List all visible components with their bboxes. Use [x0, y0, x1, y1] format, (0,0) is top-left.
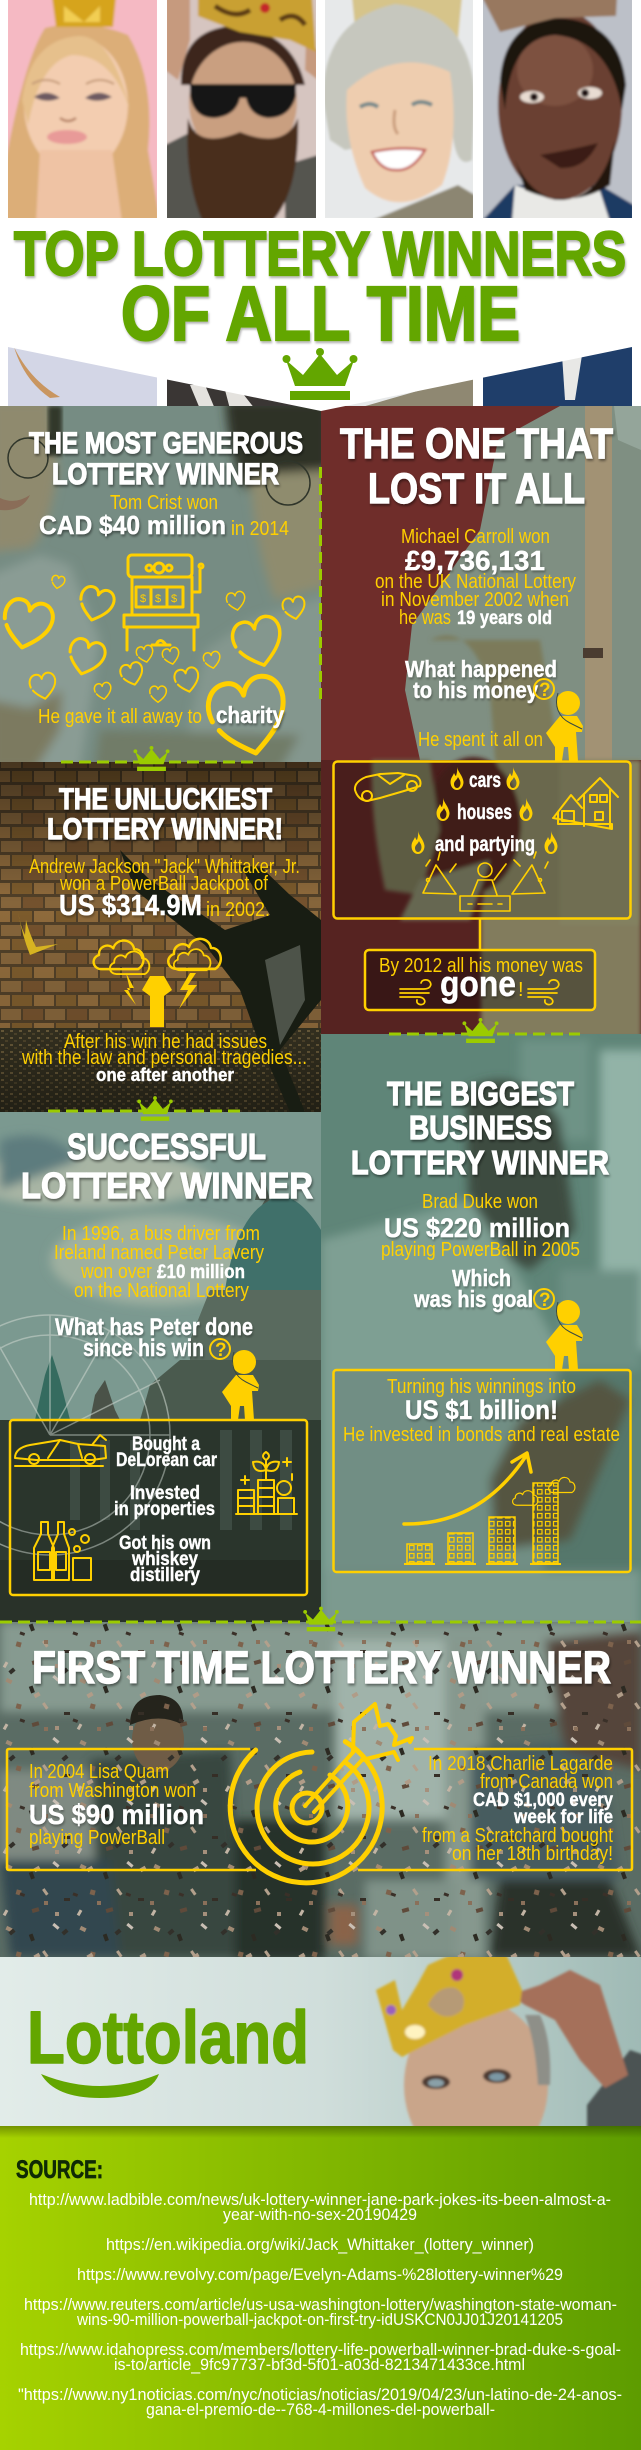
icon: target and arrow: [224, 1704, 412, 1890]
prize text: Tom Crist won: [110, 492, 218, 514]
box: money gone: [365, 950, 595, 1010]
prize text: CAD $40 million: [39, 510, 226, 540]
panel: successful winner: [0, 1112, 321, 1622]
question: [55, 1314, 253, 1362]
text: Lisa Quam: playing PowerBall: [29, 1827, 165, 1849]
question: was his goal: [413, 1286, 533, 1312]
background photo: businessman: [321, 1034, 641, 1630]
background photo: confetti party: [0, 1622, 641, 1960]
prize text: US $314.9M: [59, 890, 202, 922]
question: What happened: [405, 656, 557, 682]
heading: LOTTERY WINNER!: [47, 813, 283, 846]
icon: person with question magnifier: [534, 1289, 583, 1370]
photo: older woman smiling: [323, 0, 475, 222]
source links: https://www.reuters.com/article/us-usa-washington-lottery/washington-state-woman-: [24, 2295, 617, 2314]
text: Charlie Lagarde: In 2018 Charlie Lagarde: [428, 1753, 613, 1775]
text: Charlie Lagarde: CAD $1,000 every: [473, 1790, 613, 1811]
logo: Lottoland: [27, 1996, 309, 2079]
panel: the one that lost it all: [321, 406, 641, 1038]
heading: LOTTERY WINNER: [21, 1165, 313, 1206]
icon: title crown: [282, 348, 358, 400]
list of achievements: [114, 1434, 217, 1586]
question: [405, 656, 557, 703]
icon: delorean: [15, 1435, 106, 1466]
story text: won over: [80, 1261, 152, 1283]
question: Which: [452, 1265, 511, 1291]
connector: [479, 918, 481, 950]
list of achievements: distillery: [130, 1565, 200, 1586]
list of achievements: Bought a: [132, 1434, 200, 1455]
text: Charlie Lagarde: [422, 1753, 613, 1865]
question: to his money: [413, 677, 538, 703]
icon: banana peel: [18, 912, 58, 955]
prize text: [29, 856, 300, 922]
story text: In 1996, a bus driver from: [62, 1223, 260, 1245]
icon: sports car: [355, 773, 420, 801]
source links: is-to/article_9fc97737-bf3d-5f01-a03d-8213471433ce.html: [114, 2355, 525, 2374]
text: Lisa Quam: US $90 million: [29, 1799, 204, 1830]
source links: year-with-no-sex-20190429: [223, 2205, 417, 2224]
prize text: in November 2002 when: [381, 589, 569, 611]
prize text: Andrew Jackson "Jack" Whittaker, Jr.: [29, 856, 300, 878]
icon: hearts: [0, 575, 307, 761]
box: one billion goal: US $1 billion!: [405, 1395, 558, 1425]
panel: sources: [0, 2126, 641, 2450]
text: Lisa Quam: [29, 1761, 204, 1849]
closing text: [38, 702, 284, 728]
story text: Ireland named Peter Lavery: [54, 1242, 264, 1264]
prize text: playing PowerBall in 2005: [381, 1239, 580, 1261]
panel: unluckiest winner: [0, 762, 321, 1112]
text: Charlie Lagarde: week for life: [513, 1807, 613, 1828]
photo: man with crown: [374, 1957, 641, 2126]
prize text: 19 years old: [457, 608, 552, 629]
icon: person with question magnifier: [534, 679, 583, 761]
box: spending list: houses: [457, 801, 512, 824]
question: since his win: [83, 1335, 204, 1362]
panel: first time winner: [0, 1622, 641, 1960]
text: Charlie Lagarde: from Canada won: [480, 1771, 613, 1793]
prize text: won a PowerBall Jackpot of: [59, 873, 268, 895]
background photo: brick wall and falling man: [0, 762, 321, 1112]
prize text: US $220 million: [384, 1213, 570, 1243]
title: [14, 220, 626, 357]
prize text: [39, 492, 289, 540]
panel: Lottoland banner: [0, 1957, 641, 2126]
icon: growing buildings: [404, 1477, 575, 1564]
source links: http://www.ladbible.com/news/uk-lottery-winner-jane-park-jokes-its-been-almost-a-: [29, 2190, 611, 2209]
box: spending list: and partying: [435, 833, 535, 856]
icon: slot machine: $: [140, 593, 146, 605]
heading: [351, 1075, 609, 1181]
source links: gana-el-premio-de--768-4-millones-del-powerball-: [146, 2400, 495, 2419]
heading: LOST IT ALL: [368, 465, 585, 513]
prize text: Brad Duke won: [422, 1191, 538, 1213]
source links: https://www.idahopress.com/members/lottery-life-powerball-winner-brad-duke-s-goal-: [20, 2340, 621, 2359]
prize text: he was: [399, 607, 451, 629]
icon: person with question magnifier: [210, 1339, 259, 1420]
prize text: [375, 526, 576, 629]
source links: https://www.revolvy.com/page/Evelyn-Adams-%28lottery-winner%29: [77, 2265, 563, 2284]
heading: THE BIGGEST: [387, 1075, 574, 1112]
heading: LOTTERY WINNER: [52, 458, 279, 491]
photo: blonde woman: [4, 0, 160, 222]
prize text: in 2002.: [206, 899, 270, 921]
panel: most generous winner: [0, 400, 330, 770]
icon: slot machine: $: [155, 593, 161, 605]
source links: https://en.wikipedia.org/wiki/Jack_Whittaker_(lottery_winner): [106, 2235, 534, 2254]
box: what Peter did: [10, 1420, 307, 1595]
heading: LOTTERY WINNER: [351, 1144, 609, 1181]
box: spending list: [334, 762, 630, 918]
photo strip below title: [8, 347, 632, 409]
icon: dj and party poppers: [423, 852, 548, 911]
heading: [47, 783, 283, 846]
text: Lisa Quam: from Washington won: [29, 1780, 196, 1802]
text: he spent it all on: He spent it all on: [418, 729, 543, 751]
box: money gone: gone: [440, 963, 516, 1004]
list of achievements: DeLorean car: [116, 1450, 217, 1471]
closing text: one after another: [96, 1065, 234, 1085]
icon: houses: [553, 778, 618, 829]
text: Lisa Quam: In 2004 Lisa Quam: [29, 1761, 169, 1783]
list of achievements: whiskey: [131, 1549, 198, 1570]
prize text: on the UK National Lottery: [375, 571, 576, 593]
white chevron behind title: [0, 218, 641, 411]
box: one billion goal: Turning his winnings into: [387, 1376, 576, 1398]
icon: slot machine: [124, 555, 203, 650]
box: one billion goal: [334, 1370, 630, 1572]
panel: header photos: [4, 0, 634, 409]
prize text: in 2014: [231, 518, 289, 540]
dividers: crowns and dashed lines: [0, 467, 641, 1631]
heading: SUCCESSFUL: [67, 1126, 266, 1167]
title: OF ALL TIME: [121, 271, 520, 357]
photo: bearded man with crown: [165, 0, 318, 222]
heading: [21, 1126, 313, 1206]
prize text: [381, 1191, 580, 1261]
prize text: £9,736,131: [405, 545, 545, 576]
story text: on the National Lottery: [74, 1280, 249, 1302]
list of achievements: Got his own: [119, 1533, 211, 1554]
background photo: Belfast city hall: [0, 1112, 321, 1622]
closing text: with the law and personal tragedies...: [21, 1047, 307, 1069]
closing text: After his win he had issues: [64, 1031, 267, 1053]
icon: storm clouds over person: [94, 939, 221, 1027]
list of achievements: in properties: [114, 1499, 215, 1520]
heading: THE UNLUCKIEST: [59, 783, 272, 816]
box: money gone: !: [518, 979, 524, 1001]
box: spending list: cars: [469, 769, 501, 792]
source links: [18, 2190, 622, 2419]
background photo: two men: [0, 400, 330, 770]
icon: plant on coins: [236, 1452, 297, 1514]
source links: wins-90-million-powerball-jackpot-on-first-try-idUSKCN0JJ01J20141205: [76, 2310, 563, 2329]
text: Charlie Lagarde: on her 18th birthday!: [452, 1843, 613, 1865]
story text: £10 million: [157, 1262, 245, 1283]
heading: THE MOST GENEROUS: [29, 427, 303, 460]
icon: flames: [412, 767, 558, 854]
icon: person with question magnifier: ?: [215, 1340, 227, 1361]
heading: [29, 427, 303, 491]
question: What has Peter done: [55, 1314, 253, 1341]
background photo: man with empty pockets: [321, 406, 641, 1038]
icon: slot machine: $: [171, 593, 177, 605]
closing text: charity: [216, 702, 284, 728]
closing text: [21, 1031, 307, 1085]
arrow: growth: [404, 1453, 531, 1524]
panel: biggest business winner: [321, 1034, 641, 1630]
story text: [54, 1223, 264, 1302]
photo: man in navy suit: [481, 0, 634, 222]
source links: "https://www.ny1noticias.com/nyc/noticias/noticias/2019/04/23/un-latino-de-24-anos-: [18, 2385, 622, 2404]
heading: source: SOURCE:: [16, 2156, 103, 2184]
heading: BUSINESS: [409, 1109, 552, 1146]
question: [413, 1265, 533, 1312]
heading: [340, 420, 613, 513]
prize text: Michael Carroll won: [401, 526, 550, 548]
closing text: He gave it all away to: [38, 706, 202, 728]
box: winners outline: [7, 1749, 632, 1870]
icon: person with question magnifier: ?: [539, 1290, 551, 1311]
icon: person with question magnifier: ?: [539, 680, 551, 701]
icon: whiskey bottles: [34, 1522, 91, 1580]
text: Charlie Lagarde: from a Scratchard bought: [422, 1825, 613, 1847]
list of achievements: Invested: [130, 1483, 200, 1504]
box: money gone: By 2012 all his money was: [379, 955, 583, 977]
